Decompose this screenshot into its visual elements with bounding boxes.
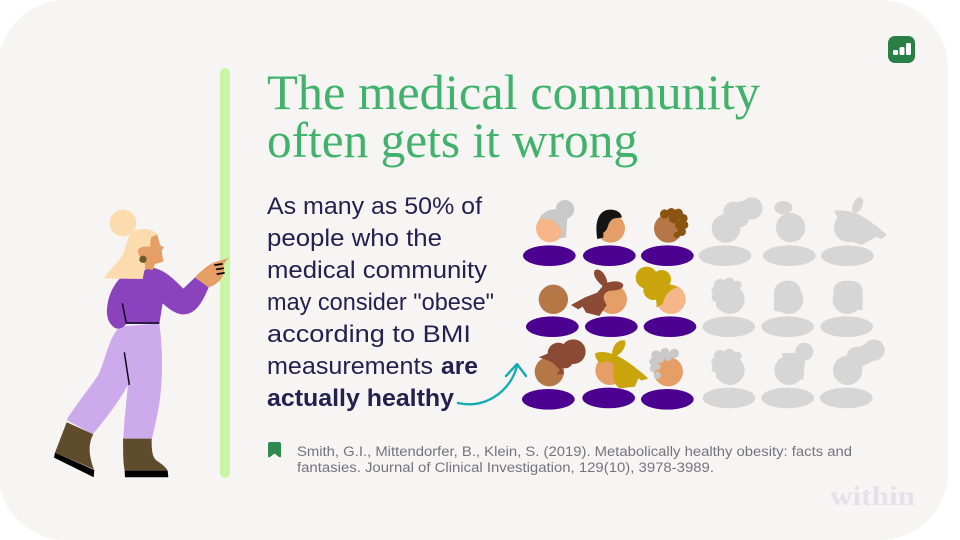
pointing hand [195,258,229,287]
left boot [55,422,94,469]
grey person 9 [820,339,885,408]
people grid: greyed out [699,195,887,408]
grey person 7 [703,349,755,408]
body text: may consider "obese" [267,289,494,316]
right boot [123,439,168,471]
person 1 [523,200,576,266]
person 2 [583,210,636,266]
body text: medical community [267,257,487,284]
sweater [107,267,209,329]
within wordmark: within [830,481,915,511]
finger lines [215,264,224,274]
body text: As many as 50% of [267,193,482,220]
person 4 [526,285,579,337]
title [267,64,760,168]
earring [139,256,147,263]
grey person 5 [761,281,814,337]
person 9 [641,348,694,410]
grey person 1 [699,197,763,266]
citation text: Smith, G.I., Mittendorfer, B., Klein, S. (2019). Metabolically healthy obesity: facts and [297,444,852,459]
person 7 [522,339,586,410]
vertical green rule [220,68,230,478]
hair [104,229,157,279]
arrow: from text to people [458,364,526,404]
citation text: fantasies. Journal of Clinical Investigation, 129(10), 3978-3989. [297,460,714,475]
citation text [297,444,852,475]
body text: are [441,353,478,380]
grey person 3 [821,195,887,266]
grey person 2 [763,201,816,266]
people grid: coloured (healthy) [522,200,696,410]
person 6 [636,267,696,337]
clothing fold lines [122,303,159,385]
trousers [67,323,162,439]
body text: actually healthy [267,385,455,412]
person 3 [641,208,694,266]
person pointing at rule [54,210,229,477]
title: often gets it wrong [267,112,638,168]
body text: measurements [267,353,433,380]
body text [267,193,494,412]
grey person 6 [820,281,873,337]
body text: people who the [267,225,442,252]
person 5 [571,269,638,337]
grey person 8 [761,343,814,408]
citation bookmark icon [268,442,281,457]
title: The medical community [267,64,760,120]
app icon: green chart badge [888,36,915,63]
face and neck [138,234,164,270]
body text: according to BMI [267,321,471,348]
grey person 4 [702,278,755,337]
person 8 [582,340,648,408]
hair bun [110,210,136,236]
